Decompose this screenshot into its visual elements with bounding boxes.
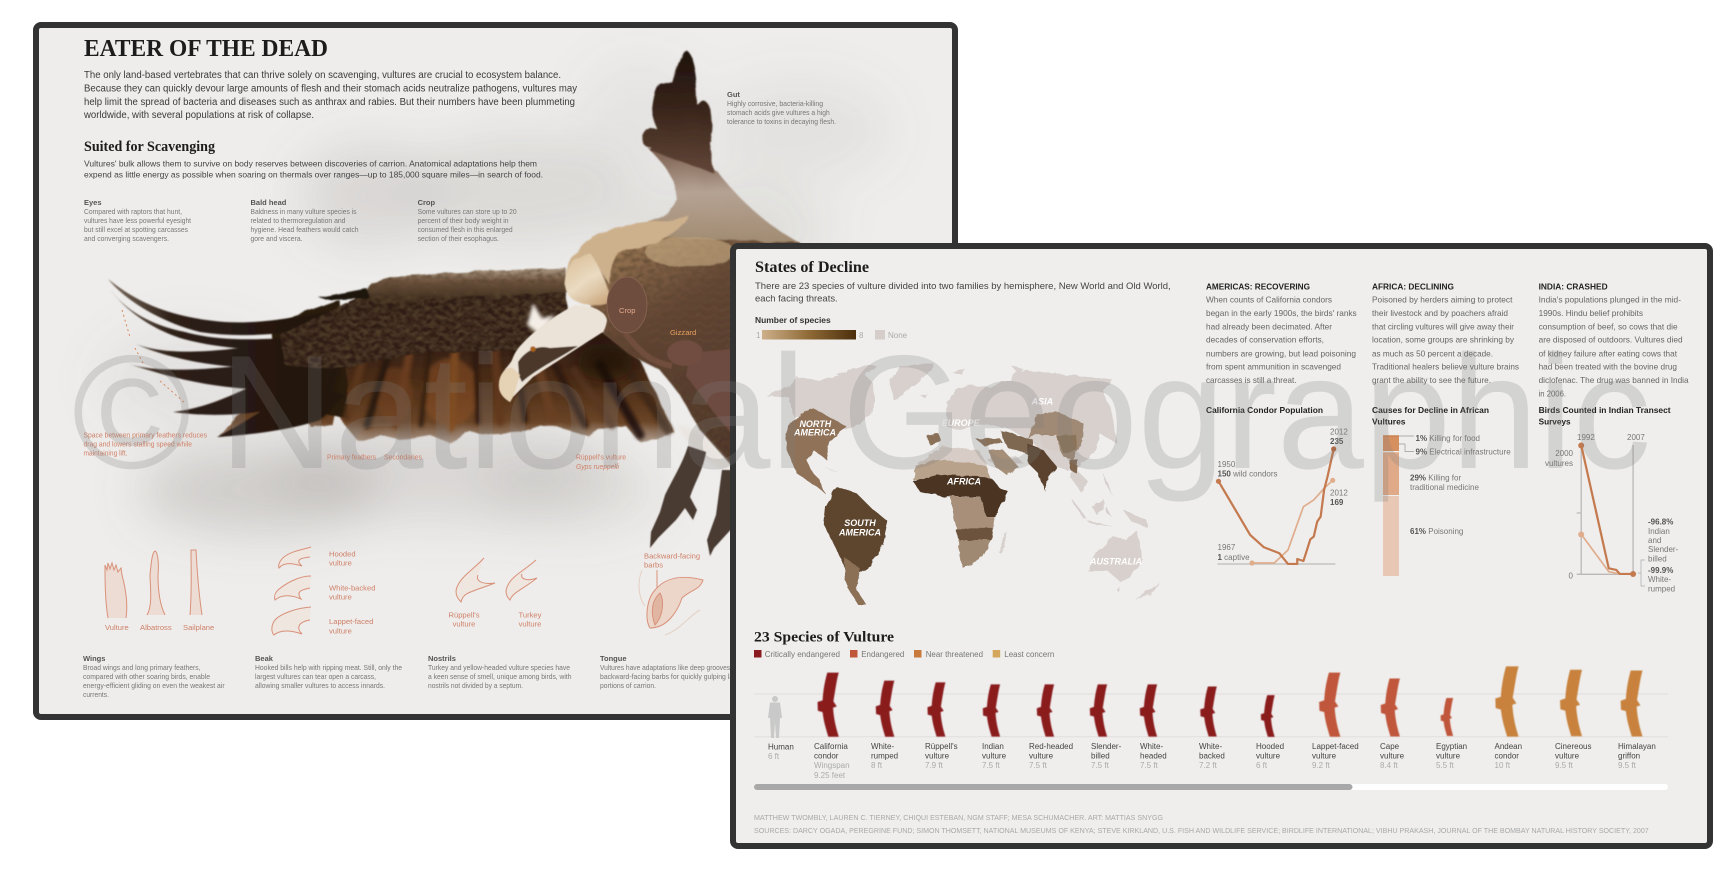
line chart: birds counted in indian transect surveys: Indian	[1648, 527, 1670, 536]
scrollbar	[754, 784, 1668, 790]
chart title: causes for decline	[1372, 405, 1489, 427]
label: backward-facing barbs: Backward-facing	[644, 552, 700, 560]
copyright watermark: ©	[72, 322, 191, 503]
label: species name	[576, 452, 626, 471]
species labels: griffon	[1618, 752, 1640, 760]
species labels: vulture	[1256, 752, 1281, 760]
column: americas: numbers are growing, but lead poisoning	[1206, 348, 1356, 358]
icon: tongue	[639, 570, 703, 635]
map legend: 1	[756, 331, 761, 340]
chart title: california condor: California Condor Population	[1206, 405, 1323, 415]
icon: rüppell's vulture nostril	[456, 558, 495, 602]
line chart: california condor population: 235	[1330, 437, 1344, 446]
wing feather streaks	[322, 350, 668, 435]
species labels: vulture	[1029, 752, 1054, 760]
line chart: california condor population: 169	[1330, 498, 1344, 507]
species labels: vulture	[925, 752, 950, 760]
line chart: birds counted in indian transect surveys: 0	[1569, 572, 1574, 580]
annotation: primary feather spacing: maintaining lift.	[84, 448, 128, 458]
column: americas: When counts of California condors	[1206, 295, 1332, 305]
species labels: 7.9 ft	[925, 761, 944, 770]
species labels: Red-headed	[1029, 742, 1073, 751]
description	[755, 280, 1171, 304]
description: each facing threats.	[755, 293, 838, 304]
line chart: california condor population: 1967	[1218, 543, 1236, 552]
line chart: birds counted in indian transect surveys: White-	[1648, 575, 1671, 584]
species labels: 9.2 ft	[1312, 761, 1331, 770]
species labels: vulture	[1555, 752, 1580, 760]
endangered silhouettes	[1319, 673, 1453, 737]
far wing stem	[590, 147, 802, 308]
beak icons	[272, 547, 311, 635]
note: gut	[727, 90, 836, 126]
note: beak: Beak	[255, 654, 274, 663]
nostril labels: vulture	[519, 620, 541, 628]
species labels: White-	[1140, 742, 1163, 751]
nostril labels	[448, 610, 542, 628]
legs and talons	[650, 446, 735, 556]
note: crop	[418, 198, 517, 243]
column: africa: their livestock and by poachers afraid	[1372, 308, 1508, 318]
annotation: primary feather spacing: Space between primary feathers reduces	[84, 430, 207, 440]
note: eyes: but still excel at spotting carcasses	[84, 225, 188, 234]
note: eyes: and converging scavengers.	[84, 234, 169, 243]
line chart: birds counted in indian transect surveys: 2000	[1555, 449, 1574, 458]
species labels: Rüppell's	[925, 742, 958, 751]
note: wings: energy-efficient gliding on even the weakest air	[83, 681, 225, 690]
note: gut: Gut	[727, 90, 740, 99]
column: americas: carcasses is still a threat.	[1206, 375, 1296, 385]
note: eyes: Compared with raptors that hunt,	[84, 207, 182, 216]
note: gut: Highly corrosive, bacteria-killing	[727, 99, 823, 108]
intro text: Because they can quickly devour large amounts of flesh and their stomach acids neutralize pathogens, vultures may	[84, 84, 577, 94]
icon: white-backed vulture beak	[274, 576, 311, 600]
species size chart	[754, 666, 1668, 780]
organ: gizzard	[667, 340, 703, 366]
species labels: 7.2 ft	[1199, 761, 1218, 770]
stacked bar: causes for decline in african vultures	[1383, 434, 1511, 576]
chart title: causes for decline: Causes for Decline in African	[1372, 405, 1489, 415]
note: tongue: Vultures have adaptations like deep grooves and	[600, 663, 743, 672]
description: There are 23 species of vulture divided into two families by hemisphere, New World and Old World,	[755, 280, 1171, 291]
beak labels: White-backed	[329, 584, 375, 592]
label: primary feathers: Primary feathers	[327, 452, 376, 462]
species labels: White-	[1199, 742, 1222, 751]
species labels: Hooded	[1256, 742, 1284, 751]
species labels: 6 ft	[1256, 761, 1268, 770]
nostril labels: Rüppell's	[448, 610, 480, 620]
species labels: 7.5 ft	[1091, 761, 1110, 770]
beak labels: vulture	[329, 558, 352, 568]
continent labels: SOUTH	[844, 518, 876, 528]
species labels	[768, 742, 1656, 780]
icon: turkey vulture nostril	[506, 560, 537, 600]
note: gut: stomach acids give vultures a high	[727, 108, 830, 117]
chart title: causes for decline: Vultures	[1372, 417, 1406, 427]
wing comparison icons	[105, 550, 202, 618]
chart title: birds counted	[1539, 405, 1671, 427]
label: species name: Rüppell's vulture	[576, 452, 626, 462]
chart title: birds counted: Birds Counted in Indian Transect	[1539, 405, 1671, 415]
nostril labels: Turkey	[519, 610, 542, 620]
body	[592, 236, 800, 466]
species labels: Lappet-faced	[1312, 742, 1359, 751]
conservation status legend: Critically endangered	[765, 650, 840, 659]
species labels: Human	[768, 742, 794, 752]
heading: states of decline: States of Decline	[755, 259, 869, 276]
note: wings: Broad wings and long primary feathers,	[83, 663, 200, 672]
label: secondaries: Secondaries	[384, 452, 422, 462]
note: bald head	[250, 198, 358, 243]
species labels: condor	[1494, 752, 1519, 760]
column: africa: as much as 50 percent a decade.	[1372, 348, 1493, 358]
note: gut: tolerance to toxins in decaying flesh.	[727, 117, 836, 126]
line chart: california condor population	[1216, 428, 1348, 566]
species labels: Himalayan	[1618, 742, 1656, 751]
line chart: birds counted in indian transect surveys: rumped	[1648, 584, 1675, 594]
shoulder ridge and ruff	[565, 215, 690, 306]
continent labels: AMERICA	[838, 528, 881, 538]
species labels: vulture	[1380, 752, 1405, 760]
column: americas: AMERICAS: RECOVERING	[1206, 281, 1310, 291]
column: india: of kidney failure after eating cows that	[1539, 348, 1678, 358]
column: india: had been treated with the bovine drug	[1539, 362, 1677, 372]
line chart: california condor population: 2012	[1330, 488, 1348, 498]
credits: SOURCES: DARCY OGADA, PEREGRINE FUND; SIMON THOMSETT, NATIONAL MUSEUMS OF KENYA; STEVE KIRKLAND, U.S. FISH AND WILDLIFE SERVICE; BIRDLIFE INTERNATIONAL; VIBHU PRAKASH, JOURNAL OF THE BOMBAY NATURAL HISTORY SOCIETY, 2007	[754, 826, 1649, 835]
icon: human	[768, 696, 782, 738]
line chart: birds counted in indian transect surveys: Slender-	[1648, 545, 1679, 554]
note: crop: Some vultures can store up to 20	[418, 207, 517, 216]
continent labels: ASIA	[1031, 396, 1053, 406]
column: india: in 2006.	[1539, 388, 1566, 398]
stacked bar: causes for decline in african vultures: 29% Killing for	[1410, 474, 1461, 482]
note: bald head: Baldness in many vulture species is	[250, 207, 357, 216]
heading: suited for scavenging: Suited for Scavenging	[84, 139, 216, 155]
wing coverts	[280, 268, 570, 370]
species labels: Wingspan	[814, 761, 850, 770]
chart title: birds counted: Surveys	[1539, 417, 1571, 427]
note: tongue: backward-facing barbs for quickly gulping large	[600, 672, 743, 681]
note: tongue	[600, 654, 743, 690]
species labels: 6 ft	[768, 752, 780, 761]
wing labels: Vulture	[105, 623, 129, 632]
south america vulture range	[823, 487, 888, 605]
annotation: primary feather spacing	[84, 430, 207, 458]
icon: vulture wing	[105, 563, 127, 618]
species labels: Slender-	[1091, 742, 1122, 751]
note: crop: consumed flesh in this enlarged	[418, 225, 513, 234]
column: africa: Traditional healers believe vulture brains	[1372, 362, 1519, 372]
line chart: birds counted in indian transect surveys: -96.8%	[1648, 518, 1673, 526]
line chart: california condor population: 1 captive	[1218, 553, 1250, 562]
title: EATER OF THE DEAD	[84, 36, 328, 62]
credits	[754, 813, 1649, 835]
subheading text: expend as little energy as possible when soaring on thermals over ranges—up to 185,000 square miles—in search of food.	[84, 170, 543, 180]
continent labels: AFRICA	[946, 476, 981, 486]
continent labels: AMERICA	[793, 428, 836, 438]
species labels: 5.5 ft	[1436, 761, 1455, 770]
line chart: california condor population: 1950	[1218, 460, 1236, 469]
intro text: worldwide, with several populations at risk of collapse.	[83, 110, 314, 121]
column: india: 1990s. Hindu belief prohibits	[1539, 308, 1643, 318]
species labels: 7.5 ft	[1029, 761, 1048, 770]
north and central america vulture range	[785, 408, 847, 493]
nostril labels: vulture	[453, 620, 475, 628]
critically endangered silhouettes	[818, 673, 1275, 737]
map legend: Number of species	[755, 316, 831, 325]
note: bald head: related to thermoregulation and	[250, 216, 346, 225]
note: nostrils: nostrils not divided by a septum.	[428, 681, 523, 690]
note: wings: compared with other soaring birds, enable	[83, 672, 210, 681]
far wing tail feathers	[642, 50, 713, 172]
annotation: primary feather spacing: drag and lowers stalling speed while	[84, 440, 192, 448]
line chart: california condor population: 2012	[1330, 428, 1348, 436]
column: india: consumption of beef, so cows that die	[1539, 322, 1678, 332]
species labels: 9.25 feet	[814, 771, 846, 780]
head and beak	[499, 305, 607, 402]
note: eyes	[84, 198, 192, 243]
world map	[767, 363, 1160, 605]
map legend: None	[888, 331, 908, 340]
note: crop: percent of their body weight in	[418, 216, 509, 225]
species labels: 7.5 ft	[982, 761, 1001, 770]
note: tongue: Tongue	[600, 654, 627, 663]
species labels: headed	[1140, 752, 1167, 760]
note: beak: allowing smaller vultures to access innards.	[255, 681, 385, 690]
column: africa: location, some groups are shrinking by	[1372, 335, 1515, 345]
column: americas: from spent ammunition in scavenged	[1206, 362, 1341, 372]
continent labels: NORTH	[799, 419, 832, 429]
white neck feathers	[527, 303, 555, 335]
column: americas: decades of conservation efforts,	[1206, 335, 1324, 345]
label: crop: Crop	[619, 306, 635, 315]
intro text: The only land-based vertebrates that can thrive solely on scavenging, vultures are crucial to ecosystem balance.	[84, 70, 561, 81]
intro text: help limit the spread of bacteria and diseases such as anthrax and rabies. But their numbers have been plummeting	[84, 97, 575, 108]
wing secondaries	[219, 300, 675, 443]
species labels: rumped	[871, 752, 898, 760]
wing primaries	[108, 279, 345, 437]
note: nostrils: a keen sense of smell, unique among birds, with	[428, 672, 572, 681]
line chart: birds counted in indian transect surveys: billed	[1648, 554, 1667, 564]
africa vulture range	[913, 447, 1008, 568]
note: beak	[255, 654, 402, 690]
conservation status legend: Near threatened	[926, 650, 983, 659]
species labels: vulture	[1312, 752, 1337, 760]
stacked bar: causes for decline in african vultures: 1% Killing for food	[1416, 434, 1480, 443]
line chart: birds counted in indian transect surveys	[1545, 433, 1679, 594]
subheading text	[84, 158, 543, 180]
note: nostrils: Nostrils	[428, 654, 456, 663]
beak labels	[329, 550, 375, 636]
column: africa: AFRICA: DECLINING	[1372, 281, 1454, 291]
gut organs	[624, 334, 730, 432]
panel: states of decline	[733, 246, 1710, 846]
wing labels: Sailplane	[183, 623, 214, 632]
column: americas: had already been decimated. After	[1206, 322, 1332, 332]
map legend: 8	[859, 331, 864, 340]
species labels: vulture	[1436, 752, 1461, 760]
species labels: 8 ft	[871, 761, 883, 770]
note: nostrils: Turkey and yellow-headed vulture species have	[428, 663, 570, 672]
column: india: diclofenac. The drug was banned in India	[1539, 375, 1689, 385]
intro text	[83, 70, 577, 121]
note: eyes: Eyes	[84, 198, 102, 207]
stacked bar: causes for decline in african vultures: 61% Poisoning	[1410, 527, 1463, 536]
credits: MATTHEW TWOMBLY, LAUREN C. TIERNEY, CHIQUI ESTEBAN, NGM STAFF; MESA SCHUMACHER. ART: MATTIAS SNYGG	[754, 813, 1163, 822]
map legend	[755, 316, 908, 340]
column: africa	[1372, 281, 1519, 385]
species labels: backed	[1199, 752, 1225, 760]
species labels: Indian	[982, 742, 1004, 751]
icon: albatross wing	[147, 551, 165, 615]
dotted leader: primary feather gaps	[122, 310, 185, 403]
note: crop: section of their esophagus.	[418, 234, 499, 243]
column: india: INDIA: CRASHED	[1539, 281, 1608, 291]
nostril icons	[456, 558, 537, 602]
copyright watermark: Geographic	[842, 322, 1651, 503]
species labels: Cape	[1380, 742, 1400, 751]
conservation status legend	[754, 650, 1054, 659]
note: bald head: Bald head	[250, 198, 287, 207]
note: tongue: portions of carrion.	[600, 681, 656, 690]
species labels: 9.5 ft	[1618, 761, 1637, 770]
illustration: vulture over smoky background	[100, 50, 890, 556]
beak labels: Lappet-faced	[329, 617, 373, 626]
wing labels	[105, 623, 214, 632]
line chart: birds counted in indian transect surveys: -99.9%	[1648, 566, 1673, 575]
panel: eater of the dead	[36, 25, 955, 717]
label: gizzard: Gizzard	[670, 328, 696, 337]
note: wings: Wings	[83, 654, 105, 663]
line chart: birds counted in indian transect surveys: 2007	[1627, 433, 1645, 442]
species labels: 9.5 ft	[1555, 761, 1574, 770]
wing labels: Albatross	[140, 623, 172, 632]
heading: 23 species of vulture: 23 Species of Vulture	[754, 630, 894, 646]
continent labels: AUSTRALIA	[1089, 556, 1142, 566]
column: india	[1539, 281, 1689, 398]
note: wings	[83, 654, 225, 699]
species labels: Egyptian	[1436, 742, 1467, 751]
beak labels: vulture	[329, 626, 352, 636]
species labels: Andean	[1494, 742, 1522, 751]
beak labels: Hooded	[329, 550, 356, 558]
continent labels	[793, 396, 1142, 566]
eurasia vulture range	[927, 412, 1083, 492]
column: americas	[1206, 281, 1357, 385]
species labels: 7.5 ft	[1140, 761, 1159, 770]
column: india: are disposed of outdoors. Vultures died	[1539, 335, 1683, 345]
column: africa: Poisoned by herders aiming to protect	[1372, 295, 1513, 305]
column: india: India's populations plunged in the mid-	[1539, 295, 1681, 305]
column: africa: that circling vultures will give away their	[1372, 322, 1514, 332]
land without vultures	[767, 363, 1160, 600]
white leg tuft	[681, 428, 730, 469]
species labels: White-	[871, 742, 894, 751]
species labels: condor	[814, 752, 839, 760]
stacked bar: causes for decline in african vultures: 9% Electrical infrastructure	[1416, 448, 1511, 456]
note: crop: Crop	[418, 198, 436, 207]
note: beak: largest vultures can tear open a carcass,	[255, 672, 376, 681]
column: americas: began in the early 1900s, the birds' ranks	[1206, 308, 1357, 318]
crop organ	[607, 277, 647, 333]
conservation status legend: Least concern	[1004, 650, 1054, 659]
line chart: birds counted in indian transect surveys: 1992	[1577, 433, 1595, 442]
copyright watermark	[72, 322, 1651, 503]
column: africa: grant the ability to see the future.	[1372, 375, 1491, 385]
stacked bar: causes for decline in african vultures: traditional medicine	[1410, 483, 1479, 492]
beak labels: vulture	[329, 592, 352, 602]
species labels: California	[814, 742, 848, 751]
conservation status legend: Endangered	[861, 650, 904, 659]
label: backward-facing barbs: barbs	[644, 560, 663, 570]
icon: hooded vulture beak	[279, 547, 311, 568]
line chart: birds counted in indian transect surveys: vultures	[1545, 459, 1573, 468]
species labels: vulture	[982, 752, 1007, 760]
icon: lappet-faced vulture beak	[272, 607, 311, 635]
continent labels: EUROPE	[942, 418, 981, 428]
dark wing shadow behind neck	[577, 344, 633, 380]
line chart: california condor population: 150 wild condors	[1218, 470, 1278, 478]
species labels: billed	[1091, 752, 1110, 760]
label: species name: Gyps rueppelli	[576, 462, 619, 471]
note: bald head: gore and viscera.	[250, 234, 302, 243]
icon: sailplane wing	[190, 550, 202, 615]
note: wings: currents.	[83, 690, 109, 699]
species labels: Cinereous	[1555, 742, 1591, 751]
label: backward-facing barbs	[644, 552, 700, 570]
species labels: 10 ft	[1494, 761, 1511, 770]
map land shapes	[767, 363, 1160, 605]
subheading text: Vultures' bulk allows them to survive on body reserves between discoveries of carrion. Anatomical adaptations help them	[84, 158, 537, 168]
note: eyes: vultures have less powerful eyesight	[84, 216, 192, 225]
note: bald head: hygiene. Head feathers would catch	[250, 225, 358, 234]
note: nostrils	[428, 654, 572, 690]
note: beak: Hooked bills help with ripping meat. Still, only the	[255, 663, 402, 672]
species labels: 8.4 ft	[1380, 761, 1399, 770]
copyright watermark: National	[219, 322, 806, 503]
near threatened silhouettes	[1495, 666, 1643, 737]
line chart: birds counted in indian transect surveys: and	[1648, 536, 1661, 545]
